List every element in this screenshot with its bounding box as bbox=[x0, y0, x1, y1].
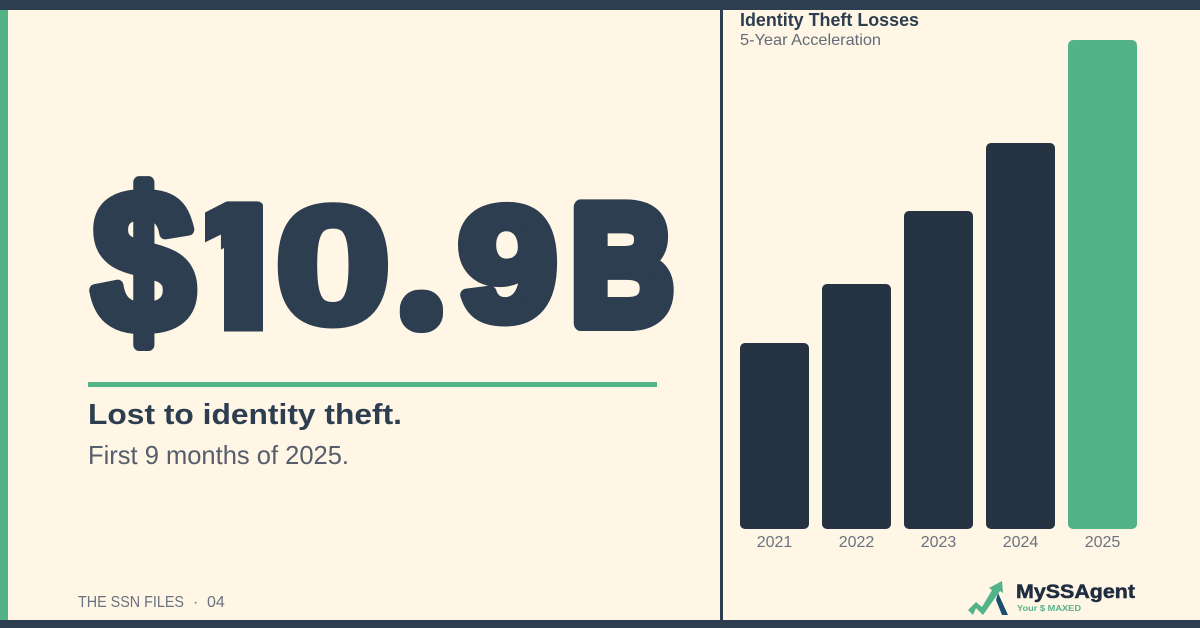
bar 2021 bbox=[740, 343, 809, 529]
bar 2024 bbox=[986, 143, 1055, 529]
bar 2023 bbox=[904, 211, 973, 529]
footer label: THE SSN FILES bbox=[78, 594, 184, 611]
bar chart bbox=[740, 40, 1137, 551]
bar 2022 bbox=[822, 284, 891, 529]
axis labels bbox=[757, 534, 1120, 551]
big stat: $10.9B: . bbox=[417, 288, 426, 321]
accent rule bbox=[88, 382, 657, 387]
axis labels: 2025 bbox=[1085, 534, 1120, 551]
big stat: $10.9B: 0 bbox=[275, 173, 391, 359]
footer label: 04 bbox=[207, 594, 225, 611]
wordmark: MySSAgent bbox=[1016, 582, 1136, 603]
big stat: $10.9B: 9 bbox=[459, 175, 557, 353]
headline: Lost to identity theft. bbox=[88, 399, 402, 431]
axis labels: 2023 bbox=[921, 534, 956, 551]
chart title: Identity Theft Losses bbox=[740, 10, 919, 30]
subheadline: First 9 months of 2025. bbox=[88, 440, 349, 470]
axis labels: 2024 bbox=[1003, 534, 1038, 551]
big stat: $10.9B: B bbox=[571, 171, 673, 359]
axis labels: 2021 bbox=[757, 534, 792, 551]
big stat: $10.9B: 1 bbox=[174, 168, 299, 365]
chart subtitle: 5-Year Acceleration bbox=[740, 32, 881, 49]
big stat: $10.9B bbox=[89, 176, 674, 351]
logo: MySSAgent bbox=[968, 581, 1136, 615]
big stat: $10.9B: $ bbox=[92, 150, 194, 373]
footer label: · bbox=[193, 594, 198, 611]
tagline: Your $ MAXED bbox=[1017, 604, 1081, 613]
bar 2025 bbox=[1068, 40, 1137, 529]
axis labels: 2022 bbox=[839, 534, 874, 551]
icon: rising arrow bbox=[968, 581, 1008, 615]
